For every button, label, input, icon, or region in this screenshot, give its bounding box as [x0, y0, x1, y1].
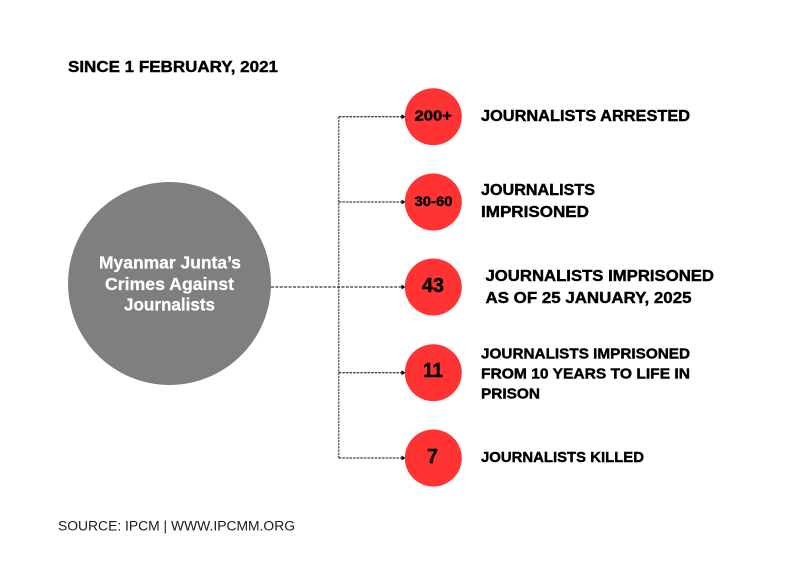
connector lines and arrows	[271, 114, 406, 460]
stat: 43 imprisoned as of date: 43	[422, 275, 444, 297]
source line: SOURCE: IPCM | WWW.IPCMM.ORG	[58, 519, 295, 534]
stat: 11 long sentences: PRISON	[481, 386, 540, 402]
stat: 43 imprisoned as of date: JOURNALISTS IMPRISONED	[486, 268, 714, 285]
central circle: topic: Myanmar Junta’s	[99, 252, 241, 272]
stat: 200+ arrested: 200+	[414, 108, 452, 124]
central circle: topic: Crimes Against	[105, 274, 234, 294]
stat: 200+ arrested	[405, 88, 690, 145]
central circle: topic: Journalists	[124, 295, 215, 315]
stat: 11 long sentences: FROM 10 YEARS TO LIFE IN	[481, 366, 690, 382]
stat: 7 killed	[405, 430, 644, 486]
stat: 7 killed: 7	[427, 446, 438, 468]
stat: 11 long sentences	[405, 344, 690, 402]
stat: 11 long sentences: JOURNALISTS IMPRISONED	[481, 346, 690, 362]
stat: 30-60 imprisoned: 30-60	[414, 193, 453, 209]
heading: since date: SINCE 1 FEBRUARY, 2021	[68, 59, 278, 76]
stat: 7 killed: JOURNALISTS KILLED	[481, 450, 644, 466]
stat: 43 imprisoned as of date	[405, 258, 714, 316]
stat: 43 imprisoned as of date: AS OF 25 JANUARY, 2025	[486, 290, 692, 307]
stat: 11 long sentences: 11	[423, 360, 443, 382]
central circle: topic	[68, 182, 271, 385]
stat: 200+ arrested: JOURNALISTS ARRESTED	[481, 108, 690, 125]
stat: 30-60 imprisoned	[405, 174, 595, 230]
stat: 30-60 imprisoned: JOURNALISTS	[481, 182, 595, 199]
stat: 30-60 imprisoned: IMPRISONED	[481, 204, 589, 221]
